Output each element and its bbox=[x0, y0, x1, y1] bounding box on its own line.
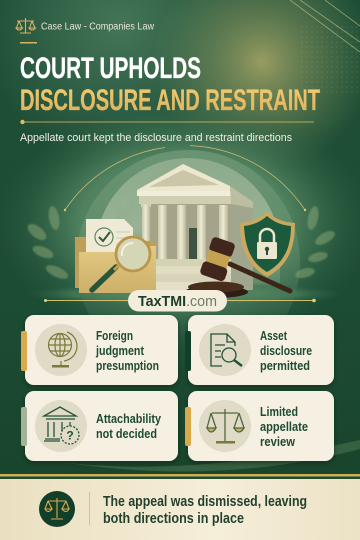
card text: Limited bbox=[260, 405, 298, 419]
card text: disclosure bbox=[260, 344, 312, 358]
footer band bbox=[0, 474, 360, 540]
icon: scales badge bbox=[39, 491, 75, 527]
card text: not decided bbox=[96, 427, 157, 441]
icon: globe bbox=[35, 324, 87, 376]
subtitle: Appellate court kept the disclosure and restraint directions bbox=[20, 132, 292, 144]
card text: Foreign bbox=[96, 329, 133, 343]
logo pill bbox=[128, 290, 227, 312]
card text: permitted bbox=[260, 359, 310, 373]
card text bbox=[95, 329, 159, 373]
icon: scales bbox=[16, 18, 36, 33]
footer text: The appeal was dismissed, leaving bbox=[103, 494, 307, 510]
card: asset disclosure bbox=[185, 315, 334, 385]
card text: presumption bbox=[96, 359, 159, 373]
title rule with dot bbox=[20, 120, 314, 124]
card: appellate review bbox=[185, 391, 334, 461]
card: attachability bbox=[21, 391, 178, 461]
card: foreign judgment bbox=[21, 315, 178, 385]
card text: Asset bbox=[260, 329, 288, 343]
footer text: both directions in place bbox=[103, 511, 244, 527]
card text: Attachability bbox=[96, 412, 161, 426]
leaves bbox=[25, 197, 337, 282]
card text bbox=[260, 405, 308, 449]
icon: balance scales bbox=[199, 400, 251, 452]
header label: icon and category bbox=[16, 18, 155, 33]
icon: institution with question mark bbox=[35, 400, 87, 452]
logo pill: TaxTMI.com bbox=[138, 293, 217, 310]
icon: document search bbox=[199, 324, 251, 376]
card text: judgment bbox=[95, 344, 145, 358]
footer text bbox=[103, 494, 307, 527]
icon: institution with question mark: ? bbox=[66, 428, 74, 442]
shield with padlock bbox=[240, 211, 295, 277]
courthouse bbox=[137, 164, 253, 292]
folder with document bbox=[75, 219, 156, 293]
card text bbox=[260, 329, 312, 373]
card text bbox=[96, 412, 161, 441]
gavel bbox=[184, 236, 290, 298]
magnifying glass bbox=[92, 237, 150, 290]
category text: Case Law - Companies Law bbox=[41, 22, 155, 32]
card text: appellate bbox=[260, 420, 308, 434]
hero illustration bbox=[25, 146, 345, 374]
dome backdrop bbox=[25, 146, 345, 374]
card text: review bbox=[260, 435, 295, 449]
pill rule bbox=[44, 299, 316, 302]
title: COURT UPHOLDS bbox=[20, 52, 201, 85]
title bbox=[20, 52, 320, 117]
